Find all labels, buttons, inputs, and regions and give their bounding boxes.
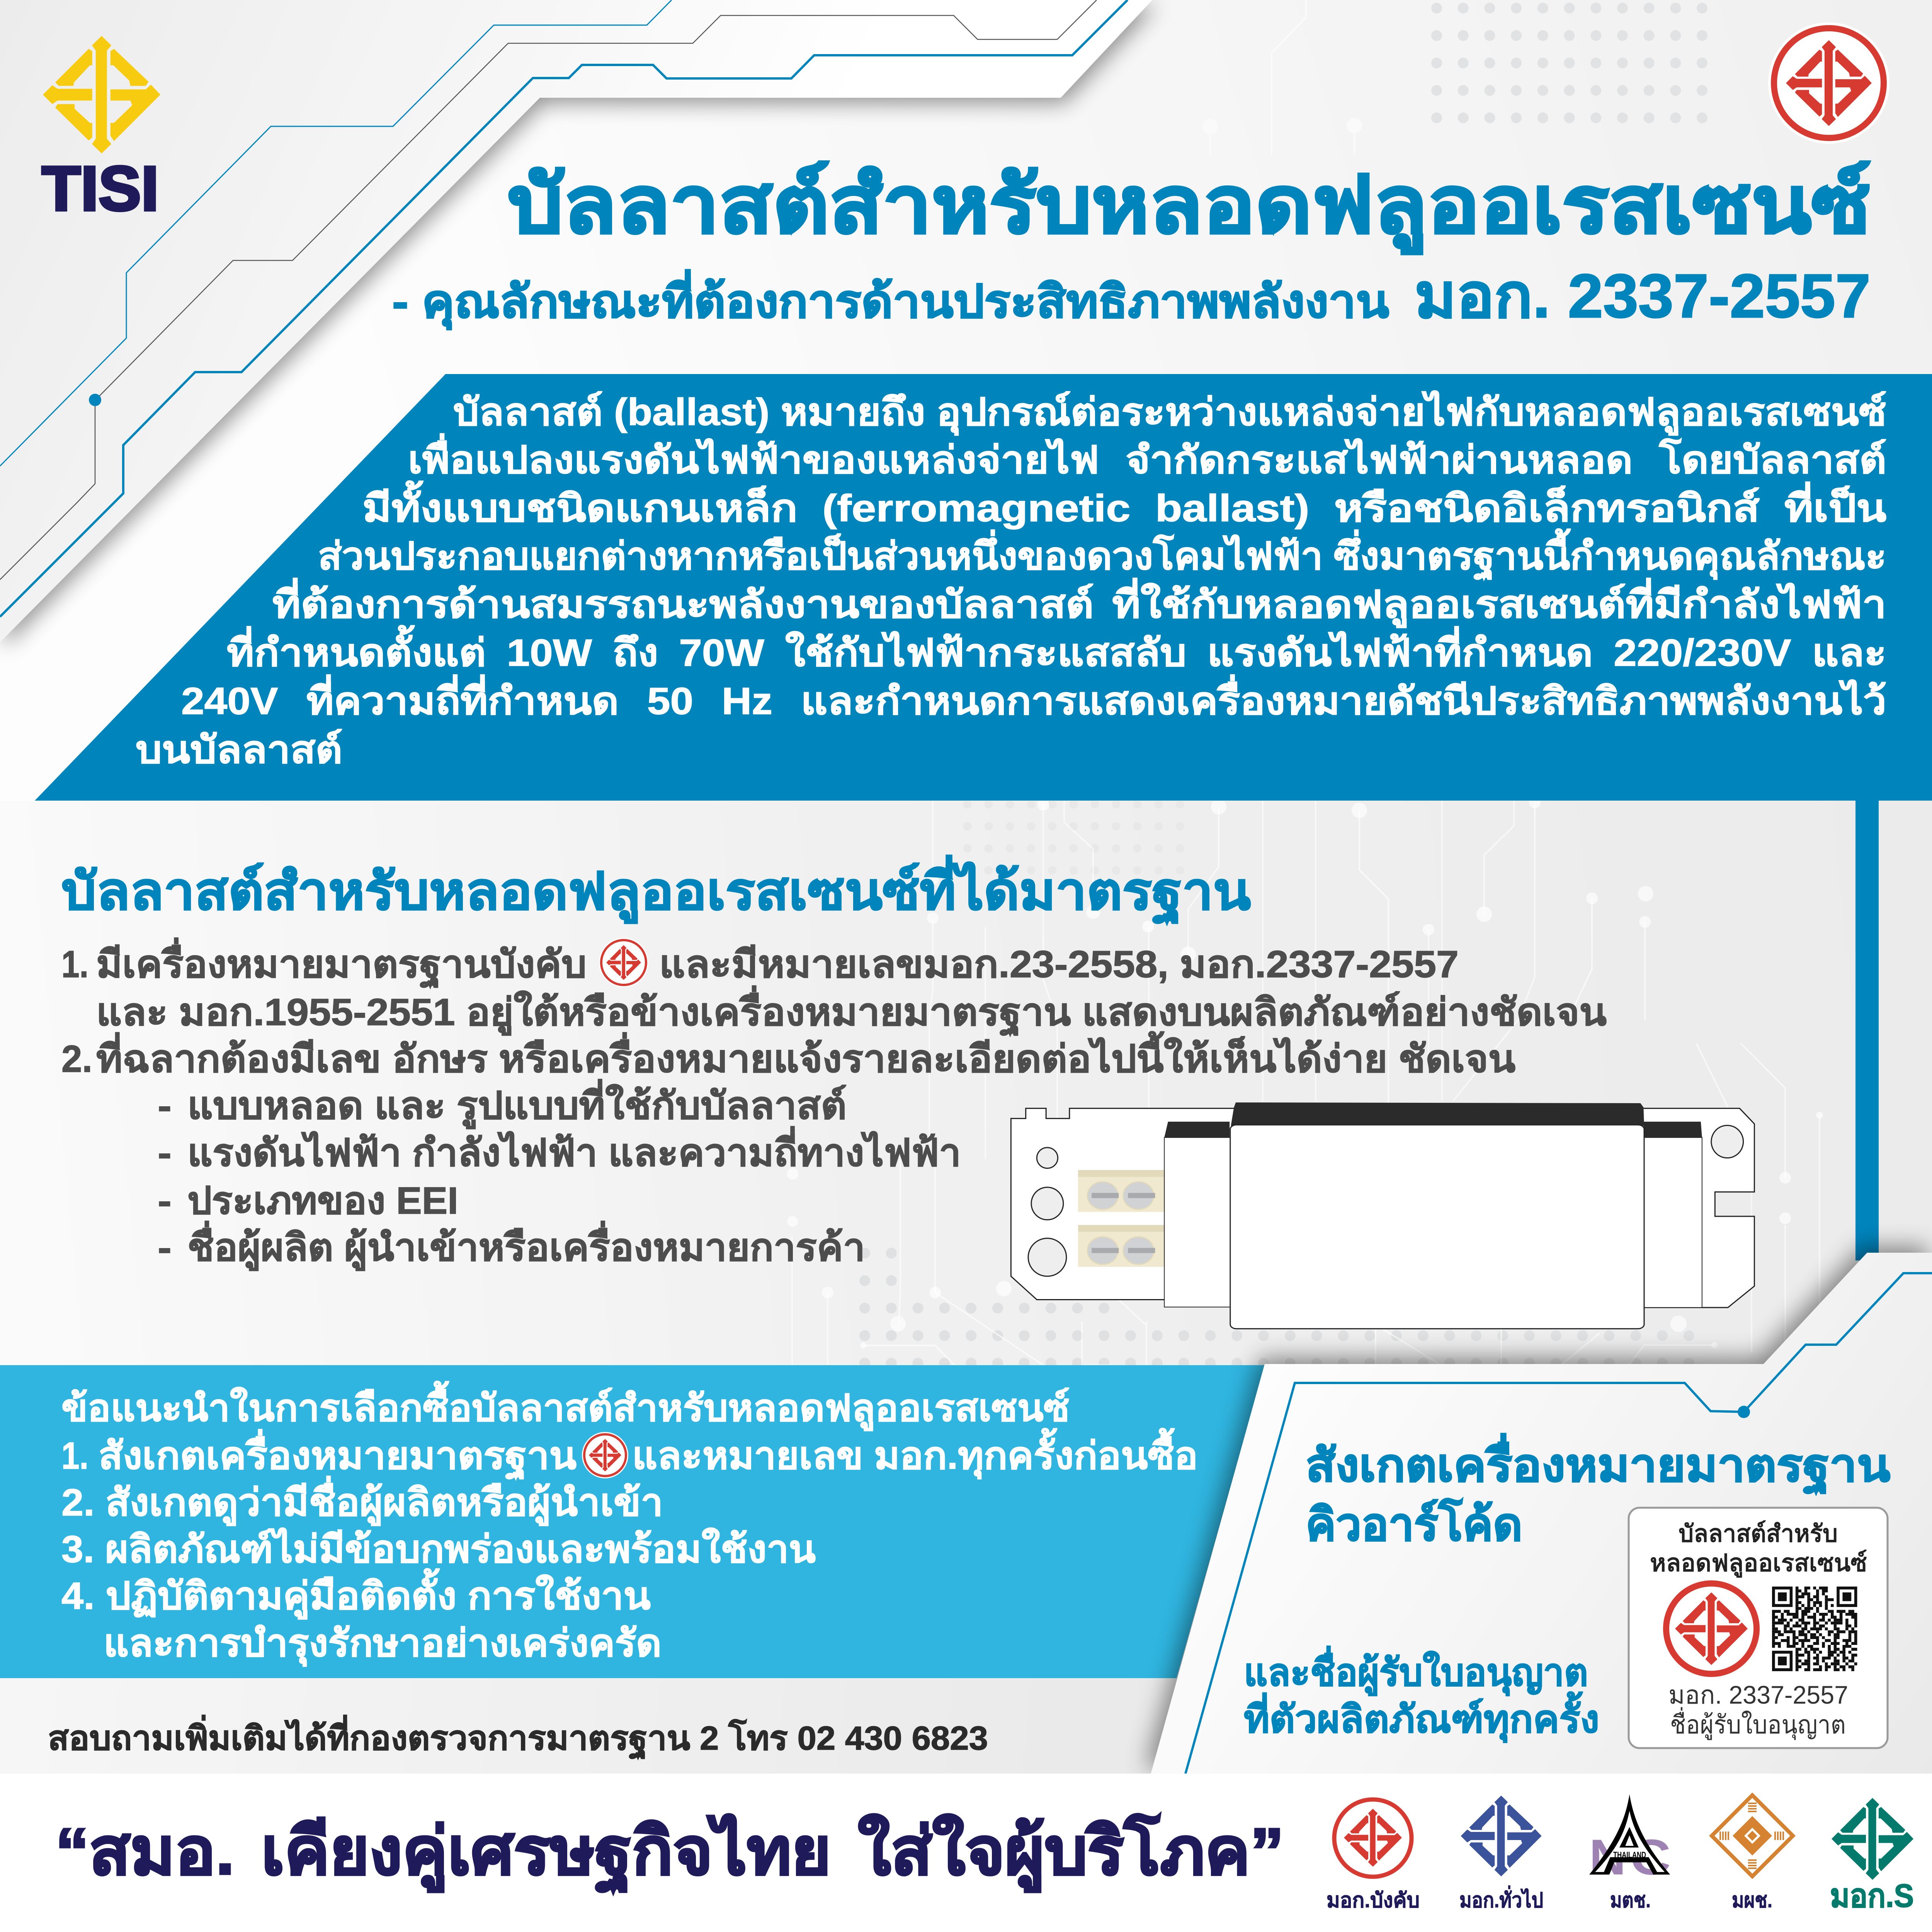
licensee note: ที่ตัวผลิตภัณฑ์ทุกครั้ง xyxy=(1244,1691,1599,1743)
logo: TISI xyxy=(42,36,160,224)
licensee note xyxy=(1244,1646,1599,1743)
title: บัลลาสต์สำหรับหลอดฟลูออเรสเซนซ์ xyxy=(508,161,1871,254)
circuit line xyxy=(1185,1273,1932,1774)
icon: mandatory seal in advice xyxy=(582,1432,628,1478)
logo: S mark xyxy=(1830,1798,1914,1914)
panel: buying advice xyxy=(0,1365,1265,1678)
label: มอก.บังคับ xyxy=(1327,1889,1420,1912)
logo: community product xyxy=(1712,1795,1793,1912)
definition text: บัลลาสต์ (ballast) หมายถึง อุปกรณ์ต่อระหว่างแหล่งจ่ายไฟกับหลอดฟลูออเรสเซนซ์ xyxy=(453,390,1886,436)
upper terminal xyxy=(1078,1170,1164,1212)
subtitle: มอก. 2337-2557 xyxy=(1415,261,1871,330)
top-left circuit line: thin dark xyxy=(0,0,1097,580)
requirements list: และมีหมายเลขมอก.23-2558, มอก.2337-2557 xyxy=(659,943,1459,985)
requirements list: แรงดันไฟฟ้า กำลังไฟฟ้า และความถี่ทางไฟฟ้า xyxy=(187,1126,961,1174)
label: มอก.S xyxy=(1830,1878,1914,1914)
mid dot grids xyxy=(852,801,1694,1365)
card licensee: ชื่อผู้รับใบอนุญาต xyxy=(1670,1707,1846,1740)
logo: general xyxy=(1459,1796,1543,1912)
panel: top-left grey overlay xyxy=(0,0,1152,642)
advice text: สังเกตเครื่องหมายมาตรฐาน xyxy=(99,1429,577,1481)
top dot grid xyxy=(1423,0,1716,132)
panel: QR area xyxy=(1151,1253,1932,1774)
advice text: 2. สังเกตดูว่ามีชื่อผู้ผลิตหรือผู้นำเข้า xyxy=(61,1476,663,1526)
definition text: ส่วนประกอบแยกต่างหากหรือเป็นส่วนหนึ่งของดวงโคมไฟฟ้า ซึ่งมาตรฐานนี้กำหนดคุณลักษณะ xyxy=(318,528,1886,581)
requirements list xyxy=(61,937,1607,1271)
subtitle xyxy=(392,261,1871,330)
requirements list: - xyxy=(158,1226,172,1269)
left block xyxy=(1164,1122,1231,1307)
label: มตช. xyxy=(1610,1889,1651,1912)
QR heading xyxy=(1306,1434,1890,1550)
card seal xyxy=(1666,1583,1757,1674)
icon: mandatory seal in list xyxy=(599,938,648,987)
logo: community (NAC tower): N xyxy=(1589,1829,1626,1885)
advice text: ข้อแนะนำในการเลือกซื้อบัลลาสต์สำหรับหลอดฟลูออเรสเซนซ์ xyxy=(61,1381,1070,1431)
requirements list: แบบหลอด และ รูปแบบที่ใช้กับบัลลาสต์ xyxy=(187,1079,847,1129)
main transformer xyxy=(1230,1102,1644,1329)
requirements list: - xyxy=(158,1084,172,1127)
card heading: บัลลาสต์สำหรับ xyxy=(1679,1520,1838,1547)
licensee note: และชื่อผู้รับใบอนุญาต xyxy=(1244,1646,1588,1696)
requirements list: 2. xyxy=(61,1037,92,1080)
ballast illustration xyxy=(1011,1102,1754,1329)
mounting holes xyxy=(1028,1125,1743,1276)
definition text xyxy=(136,390,1886,771)
mandatory standard seal, top right xyxy=(1768,22,1889,144)
logo: community (NAC tower): C xyxy=(1630,1829,1671,1885)
lower band background xyxy=(0,1678,1236,1775)
label: มผช. xyxy=(1732,1889,1772,1912)
requirements list: - xyxy=(158,1179,172,1222)
card heading xyxy=(1650,1520,1867,1578)
card standard number: มอก. 2337-2557 xyxy=(1668,1680,1848,1709)
heading: standard ballast: บัลลาสต์สำหรับหลอดฟลูออเรสเซนซ์ที่ได้มาตรฐาน xyxy=(61,855,1251,925)
footer band xyxy=(0,1774,1932,1932)
middle section background xyxy=(0,801,1932,1678)
vertical blue bar xyxy=(1855,801,1879,1260)
QR label card xyxy=(1629,1508,1888,1748)
panel: definition xyxy=(35,374,1932,801)
slogan: “สมอ. เคียงคู่เศรษฐกิจไทย ใส่ใจผู้บริโภค” xyxy=(55,1813,1284,1894)
mid circuit lines xyxy=(792,801,1820,1365)
requirements list: 1. xyxy=(61,943,88,985)
base plate xyxy=(1011,1108,1754,1308)
top-left circuit line: blue xyxy=(0,0,1128,617)
right block xyxy=(1643,1122,1702,1308)
requirements list: และ มอก.1955-2551 อยู่ใต้หรือข้างเครื่องหมายมาตรฐาน แสดงบนผลิตภัณฑ์อย่างชัดเจน xyxy=(96,985,1607,1037)
card heading: หลอดฟลูออเรสเซนซ์ xyxy=(1650,1549,1867,1578)
definition text: มีทั้งแบบชนิดแกนเหล็ก (ferromagnetic ballast) หรือชนิดอิเล็กทรอนิกส์ ที่เป็น xyxy=(362,480,1886,529)
circuit node xyxy=(1738,1406,1750,1418)
advice text: 4. ปฏิบัติตามคู่มือติดตั้ง การใช้งาน xyxy=(61,1568,651,1620)
advice text: และการบำรุงรักษาอย่างเคร่งครัด xyxy=(104,1622,662,1667)
subtitle: - คุณลักษณะที่ต้องการด้านประสิทธิภาพพลังงาน xyxy=(392,270,1389,330)
requirements list: - xyxy=(158,1131,172,1174)
QR code xyxy=(1772,1587,1857,1671)
logo: community (NAC tower): THAILAND xyxy=(1613,1850,1646,1860)
top-left circuit line: thin blue xyxy=(0,0,672,466)
requirements list: ประเภทของ EEI xyxy=(187,1179,458,1222)
contact line: สอบถามเพิ่มเติมได้ที่กองตรวจการมาตรฐาน 2 โทร 02 430 6823 xyxy=(48,1714,988,1760)
requirements list: มีเครื่องหมายมาตรฐานบังคับ xyxy=(96,937,587,989)
lower terminal xyxy=(1078,1225,1164,1267)
definition text: เพื่อแปลงแรงดันไฟฟ้าของแหล่งจ่ายไฟ จำกัดกระแสไฟฟ้าผ่านหลอด โดยบัลลาสต์ xyxy=(408,433,1886,481)
definition text: ที่กำหนดตั้งแต่ 10W ถึง 70W ใช้กับไฟฟ้ากระแสสลับ แรงดันไฟฟ้าที่กำหนด 220/230V และ xyxy=(227,625,1886,674)
circuit nodes xyxy=(787,797,1823,1349)
definition text: ที่ต้องการด้านสมรรถนะพลังงานของบัลลาสต์ ที่ใช้กับหลอดฟลูออเรสเซนต์ที่มีกำลังไฟฟ้า xyxy=(272,578,1886,628)
label: มอก.ทั่วไป xyxy=(1459,1885,1543,1912)
advice text: และหมายเลข มอก.ทุกครั้งก่อนซื้อ xyxy=(632,1428,1198,1480)
circuit node xyxy=(89,394,101,406)
advice text xyxy=(61,1381,1198,1667)
QR heading: สังเกตเครื่องหมายมาตรฐาน xyxy=(1306,1434,1890,1495)
advice text: 3. ผลิตภัณฑ์ไม่มีข้อบกพร่องและพร้อมใช้งาน xyxy=(61,1527,816,1570)
logo: TISI: TISI xyxy=(42,153,159,224)
definition text: บนบัลลาสต์ xyxy=(136,728,342,771)
logo: community (NAC tower) xyxy=(1589,1794,1671,1912)
QR heading: คิวอาร์โค้ด xyxy=(1306,1498,1522,1550)
advice text: 1. xyxy=(61,1434,88,1477)
requirements list: ที่ฉลากต้องมีเลข อักษร หรือเครื่องหมายแจ้งรายละเอียดต่อไปนี้ให้เห็นได้ง่าย ชัดเจน xyxy=(96,1031,1515,1080)
requirements list: ชื่อผู้ผลิต ผู้นำเข้าหรือเครื่องหมายการค้า xyxy=(187,1221,865,1271)
top circuit lines xyxy=(1202,0,1362,155)
definition text: 240V ที่ความถี่ที่กำหนด 50 Hz และกำหนดการแสดงเครื่องหมายดัชนีประสิทธิภาพพลังงานไว้ xyxy=(181,674,1886,722)
logo: mandatory xyxy=(1327,1799,1420,1912)
